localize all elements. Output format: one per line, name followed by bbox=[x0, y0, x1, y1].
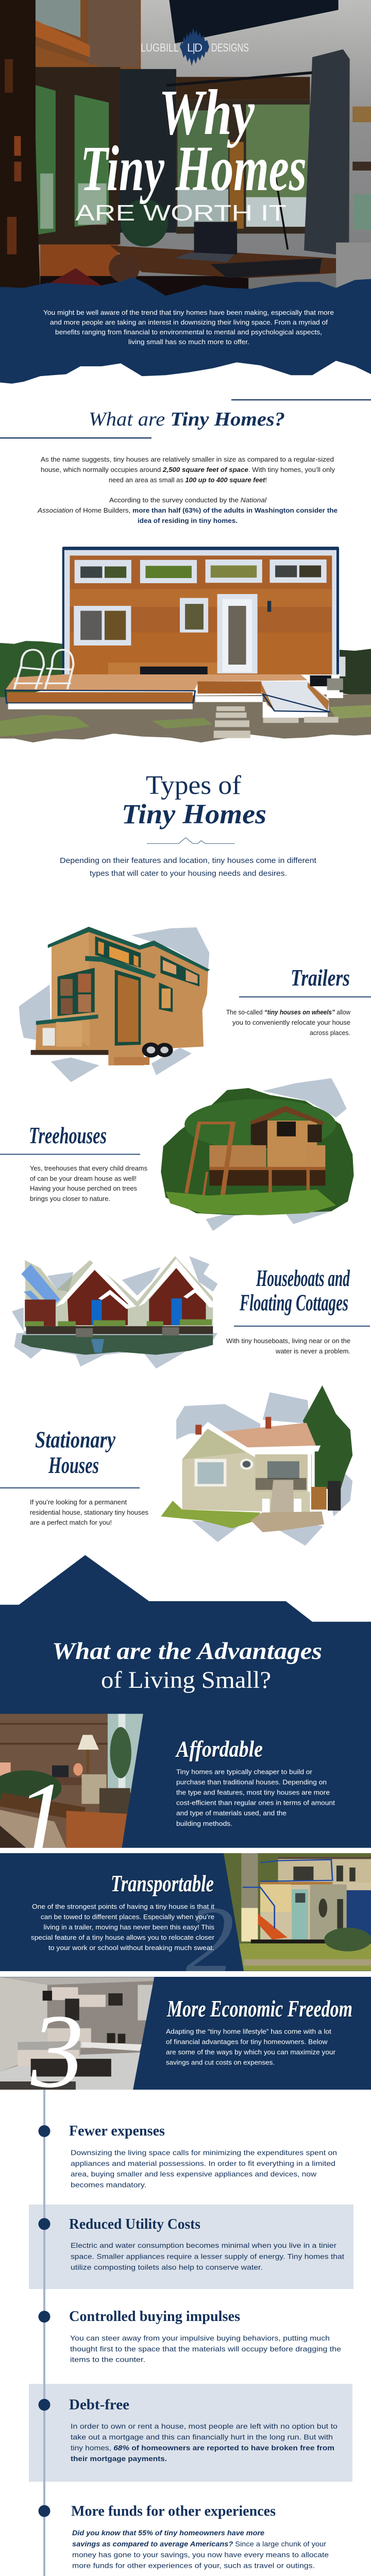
intro text bbox=[43, 309, 334, 346]
hero photo: tiny home interior bbox=[0, 0, 371, 309]
timeline: economic freedom list bbox=[29, 2090, 353, 2576]
title: Why Tiny Homes Are Worth It bbox=[75, 77, 307, 226]
item: Fewer expenses: Fewer expenses bbox=[69, 2123, 165, 2139]
heading: What are the Advantages bbox=[52, 1638, 322, 1665]
heading: Houses bbox=[48, 1452, 99, 1478]
description bbox=[226, 1337, 350, 1355]
description bbox=[30, 1164, 147, 1202]
item: Fewer expenses: becomes mandatory. bbox=[71, 2180, 146, 2189]
description: water is never a problem. bbox=[275, 1347, 350, 1355]
item: More funds for other experiences: savings as compared to average Americans? Since a large chunk of your bbox=[72, 2539, 326, 2548]
item: Fewer expenses bbox=[38, 2123, 337, 2189]
definition text bbox=[37, 455, 338, 524]
panel: advantages roof-shaped navy background bbox=[0, 1555, 371, 2090]
heading: of Living Small? bbox=[101, 1667, 271, 1693]
item: Fewer expenses: Downsizing the living space calls for minimizing the expenditures spent on bbox=[71, 2148, 337, 2157]
number 3: 3 bbox=[30, 1993, 83, 2110]
item: More funds for other experiences: more funds for other experiences of your, such as travel or outings. bbox=[72, 2562, 315, 2570]
section: What are Tiny Homes? bbox=[0, 399, 371, 524]
item: More funds for other experiences: Did you know that 55% of tiny homeowners have more bbox=[72, 2529, 264, 2537]
item: Controlled buying impulses: thought first to the space that the materials will occupy before dragging the bbox=[70, 2345, 341, 2353]
type: Stationary Houses bbox=[0, 1385, 352, 1546]
type: Treehouses bbox=[0, 1078, 354, 1231]
description bbox=[226, 1008, 351, 1037]
description: can be towed to different places. Especially when you’re bbox=[41, 1913, 214, 1921]
item: Debt-free: their mortgage payments. bbox=[71, 2454, 167, 2463]
description: One of the strongest points of having a tiny house is that it bbox=[32, 1903, 214, 1910]
photo: cedar tiny house with deck bbox=[0, 547, 371, 742]
description: and type of materials used, and the bbox=[176, 1809, 286, 1817]
description: you to conveniently relocate your house bbox=[232, 1019, 350, 1026]
heading: Transportable bbox=[111, 1870, 214, 1896]
deck and ramp bbox=[5, 657, 345, 738]
description bbox=[166, 2028, 336, 2066]
description: living in a trailer, moving has never been this easy! This bbox=[43, 1923, 215, 1931]
definition text: Association of Home Builders, more than half (63%) of the adults in Washington consider the bbox=[37, 506, 338, 514]
photo: rustic living room bbox=[0, 1714, 144, 1848]
logo: Lugbill Designs header bbox=[141, 28, 249, 66]
photo: two-storey trailer home bbox=[223, 1853, 371, 1971]
item: Debt-free: tiny homes, 68% of homeowners are reported to have broken free from bbox=[71, 2444, 334, 2452]
description: of financial advantages for tiny homeowners. Below bbox=[166, 2038, 328, 2045]
item: Fewer expenses: area, buying smaller and less expensive appliances and devices, now bbox=[71, 2170, 317, 2178]
advantage 3: More Economic Freedom bbox=[0, 1977, 352, 2110]
title: Why Tiny Homes Are Worth It: Why bbox=[159, 77, 255, 148]
types intro text: Depending on their features and location, tiny houses come in different bbox=[60, 856, 317, 865]
item: Fewer expenses: appliances and material possessions. In order to fit everything in a limited bbox=[71, 2159, 335, 2167]
description: to your work or school without breaking much sweat. bbox=[48, 1944, 214, 1952]
item: More funds for other experiences: More funds for other experiences bbox=[71, 2503, 276, 2519]
description: building methods. bbox=[176, 1820, 232, 1827]
item: Controlled buying impulses: You can steer away from your impulsive buying behaviors, putting much bbox=[70, 2334, 330, 2342]
number 2: 2 bbox=[185, 1887, 234, 1995]
description bbox=[30, 1498, 148, 1526]
item: Reduced Utility Costs: utilize composting toilets also help to conserve water. bbox=[71, 2263, 263, 2271]
intro text: living small has so much more to offer. bbox=[128, 338, 249, 346]
heading: Affordable bbox=[175, 1736, 263, 1762]
section heading: Types of Tiny Homes: Tiny Homes bbox=[122, 799, 266, 829]
logo: Lugbill Designs header: L|D bbox=[187, 41, 203, 54]
heading: Trailers bbox=[291, 964, 350, 991]
heading bbox=[239, 1265, 350, 1316]
item: Reduced Utility Costs bbox=[38, 2216, 344, 2271]
description: Tiny homes are typically cheaper to build or bbox=[176, 1768, 313, 1776]
intro text: benefits ranging from financial to environmental to mental and psychological aspects, bbox=[55, 328, 322, 336]
description: across places. bbox=[310, 1029, 350, 1037]
item: Debt-free bbox=[38, 2397, 338, 2463]
heading bbox=[52, 1638, 322, 1693]
photo: compact bedroom bbox=[0, 1977, 156, 2091]
description: special feature of a tiny house allows you to relocate closer bbox=[31, 1934, 215, 1941]
photo: small cottage house bbox=[161, 1385, 352, 1546]
heading: Stationary bbox=[35, 1426, 115, 1453]
description: are a perfect match for you! bbox=[30, 1519, 112, 1526]
description: brings you closer to nature. bbox=[30, 1195, 110, 1202]
section heading: Types of Tiny Homes bbox=[60, 771, 317, 878]
definition text: As the name suggests, tiny houses are relatively smaller in size as compared to a regular-sized bbox=[41, 455, 334, 463]
item: Controlled buying impulses bbox=[38, 2309, 341, 2364]
description: With tiny houseboats, living near or on the bbox=[226, 1337, 350, 1345]
heading bbox=[35, 1426, 115, 1478]
description: purchase than traditional houses. Depending on bbox=[176, 1778, 327, 1786]
item: Debt-free: Debt-free bbox=[69, 2397, 129, 2413]
item: Reduced Utility Costs: space. Smaller appliances require a lesser supply of energy. Tiny homes that bbox=[71, 2252, 344, 2261]
photo: tiny house on trailer bbox=[19, 927, 209, 1082]
advantage 1: Affordable bbox=[0, 1714, 335, 1848]
definition text: need an area as small as 100 up to 400 square feet! bbox=[109, 476, 267, 484]
advantage 2: Transportable bbox=[31, 1853, 371, 1971]
description: Yes, treehouses that every child dreams bbox=[30, 1164, 147, 1172]
description: residential house, stationary tiny houses bbox=[30, 1509, 148, 1516]
number 1: 1 bbox=[15, 1761, 67, 1875]
heading: What are Tiny Homes? bbox=[89, 409, 285, 430]
item: More funds for other experiences bbox=[38, 2503, 329, 2570]
description: Having your house perched on trees bbox=[30, 1184, 137, 1192]
types intro text: types that will cater to your housing needs and desires. bbox=[90, 869, 287, 878]
item: Debt-free: take out a mortgage and this can financially hurt in the long run. But with bbox=[71, 2433, 333, 2441]
item: Reduced Utility Costs: Reduced Utility Costs bbox=[69, 2216, 200, 2232]
panel: intro navy band bbox=[0, 277, 371, 384]
description: of can be your dream house as well! bbox=[30, 1175, 137, 1182]
intro text: and more people are taking an interest in downsizing their living space. From a myriad of bbox=[50, 318, 328, 326]
item: More funds for other experiences: money has gone to your savings, you now have every means to allocate bbox=[72, 2550, 329, 2558]
type: Trailers bbox=[19, 927, 371, 1082]
description bbox=[176, 1768, 335, 1827]
title: Why Tiny Homes Are Worth It: ARE WORTH IT bbox=[75, 200, 286, 226]
description: cost-efficient than regular ones in terms of amount bbox=[176, 1799, 335, 1807]
item: Debt-free: In order to own or rent a house, most people are left with no option but to bbox=[71, 2422, 338, 2430]
intro text: You might be well aware of the trend that tiny homes have been making, especially that more bbox=[43, 309, 334, 316]
definition text: idea of residing in tiny homes. bbox=[138, 517, 238, 524]
type: Houseboats and Floating Cottages bbox=[12, 1256, 370, 1368]
definition text: According to the survey conducted by the National bbox=[109, 496, 267, 504]
icon: white folding chairs bbox=[14, 650, 73, 689]
logo: Lugbill Designs header: DESIGNS bbox=[211, 41, 249, 54]
item: Reduced Utility Costs: Electric and water consumption becomes minimal when you live in a tinier bbox=[71, 2241, 336, 2249]
description: the type and features, most tiny houses are more bbox=[176, 1788, 330, 1796]
item: Controlled buying impulses: items to the counter. bbox=[70, 2355, 145, 2364]
photo: wooden treehouse bbox=[161, 1078, 354, 1231]
description: Adapting the “tiny home lifestyle” has come with a lot bbox=[166, 2028, 331, 2035]
item: Controlled buying impulses: Controlled buying impulses bbox=[69, 2309, 240, 2325]
logo: Lugbill Designs header: LUGBILL bbox=[141, 41, 179, 54]
photo: floating cottages bbox=[12, 1256, 217, 1368]
description bbox=[31, 1903, 215, 1952]
description: If you’re looking for a permanent bbox=[30, 1498, 127, 1506]
heading: Treehouses bbox=[29, 1122, 107, 1148]
description: The so-called “tiny houses on wheels” allow bbox=[226, 1008, 351, 1016]
description: savings and cut costs on expenses. bbox=[166, 2059, 275, 2066]
description: are some of the ways by which you can maximize your bbox=[166, 2048, 336, 2056]
section heading: Types of Tiny Homes: Types of bbox=[146, 771, 242, 800]
definition text: house, which normally occupies around 2,500 square feet of space . With tiny homes, you’ll only bbox=[41, 466, 335, 473]
types intro text bbox=[60, 856, 317, 878]
